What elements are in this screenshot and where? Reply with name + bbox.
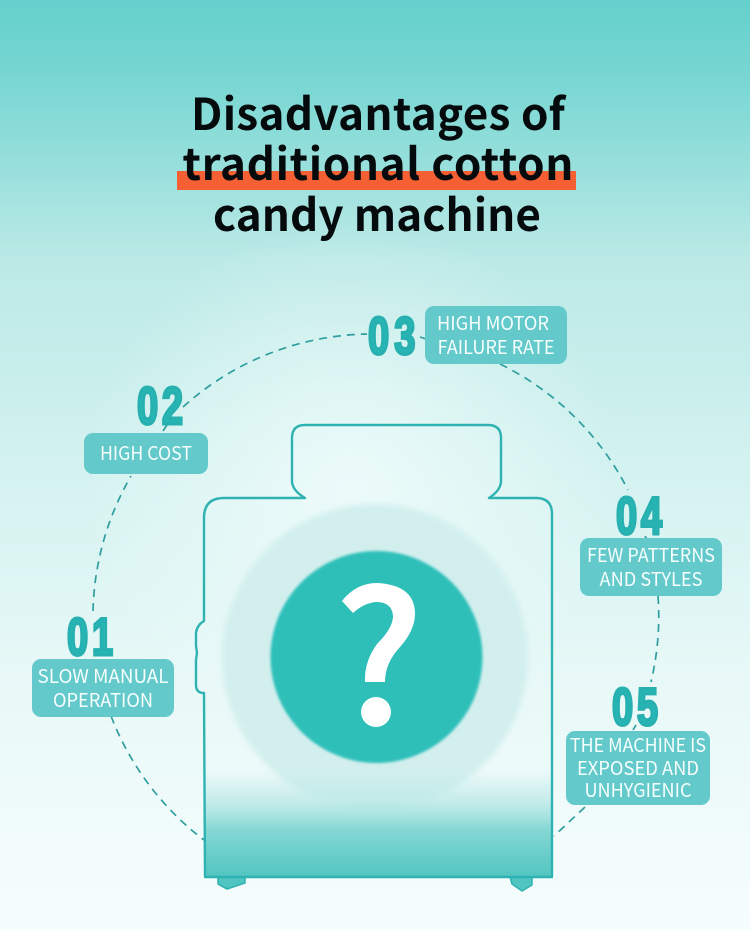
item 05: UNHYGIENIC xyxy=(584,776,692,803)
number 01: 01 xyxy=(67,607,117,666)
machine base gradient xyxy=(205,755,551,877)
item 03: FAILURE RATE xyxy=(438,333,554,360)
inner teal circle xyxy=(270,551,482,763)
label text 05: THE MACHINE IS xyxy=(570,731,706,758)
label box 04 xyxy=(580,538,722,596)
title: traditional cotton xyxy=(182,129,574,193)
title text: Disadvantages of xyxy=(191,79,567,143)
title highlight bar xyxy=(177,171,576,190)
label box 01 xyxy=(32,659,174,717)
machine outline xyxy=(196,425,552,877)
item 01 xyxy=(32,607,174,717)
number 02: 02 xyxy=(137,376,187,435)
machine illustration xyxy=(196,425,552,891)
title xyxy=(177,79,576,244)
icon: question mark xyxy=(342,583,415,727)
title: candy machine xyxy=(213,180,541,244)
number 04: 04 xyxy=(616,486,666,545)
item 04: AND STYLES xyxy=(600,565,702,592)
item 02 xyxy=(84,376,208,474)
label box 02 xyxy=(84,433,208,474)
label text 03: HIGH MOTOR xyxy=(437,309,549,336)
label text 04: FEW PATTERNS xyxy=(587,541,715,568)
item 04 xyxy=(580,486,722,596)
outer blurred ring xyxy=(222,504,528,810)
label text 01: SLOW MANUAL xyxy=(38,662,168,689)
label text 02: HIGH COST xyxy=(100,439,192,466)
dashed circle connector xyxy=(93,334,659,840)
item 05: EXPOSED AND xyxy=(577,754,699,781)
machine feet xyxy=(218,877,532,891)
number 05: 05 xyxy=(612,677,662,736)
item 01: OPERATION xyxy=(53,686,153,713)
item 05 xyxy=(566,677,710,805)
label box 03 xyxy=(425,306,567,364)
item 03 xyxy=(368,306,567,365)
label box 05 xyxy=(566,731,710,805)
number 03: 03 xyxy=(368,306,421,365)
